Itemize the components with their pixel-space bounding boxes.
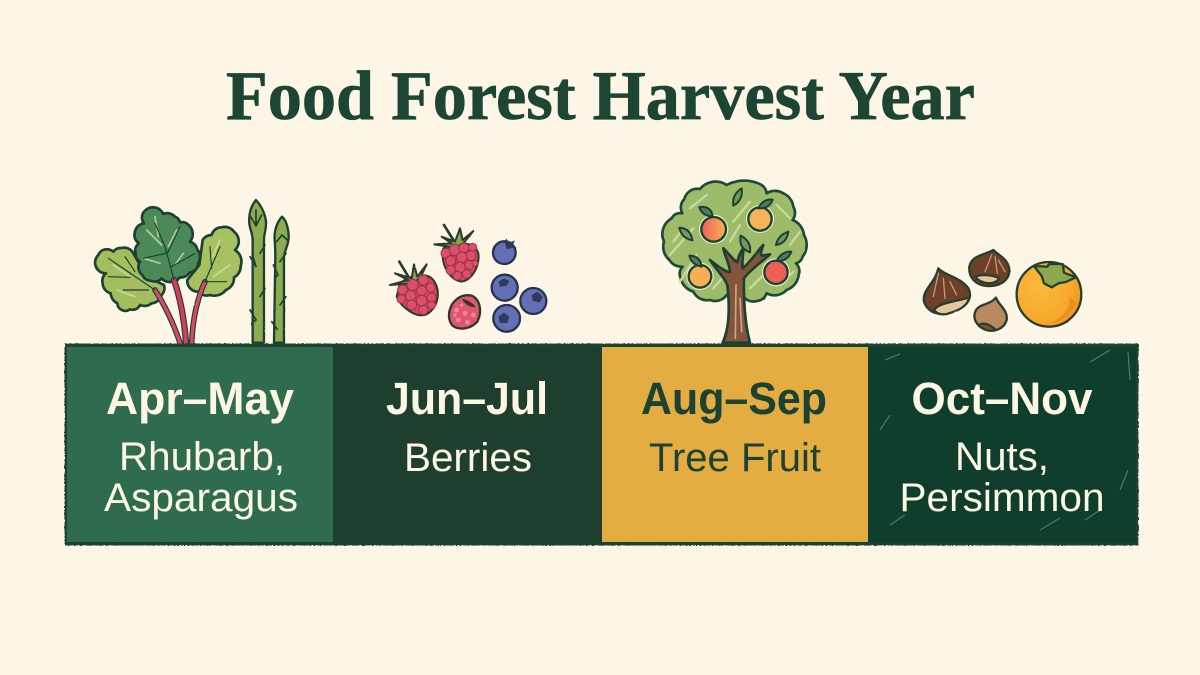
large chestnut <box>924 268 970 314</box>
tree crown <box>662 181 807 302</box>
panel: Aug-Sep <box>602 347 868 542</box>
icon: nuts and persimmon <box>924 250 1081 331</box>
title: Food Forest Harvest Year <box>226 58 975 135</box>
stalks <box>155 290 180 343</box>
panel: Jun-Jul: Jun–Jul <box>386 373 548 424</box>
leaves <box>679 188 791 267</box>
panel: Apr-May: Rhubarb, <box>119 435 285 479</box>
crown hatching <box>670 195 800 288</box>
leaf veins <box>108 223 227 290</box>
panel: Apr-May: Apr–May <box>106 373 294 424</box>
top raspberry <box>434 225 479 282</box>
icon: berries <box>390 225 546 332</box>
top chestnut <box>969 250 1009 286</box>
right rhubarb leaf <box>187 227 241 296</box>
panel: Oct-Nov <box>868 347 1136 542</box>
panel: Apr-May: Asparagus <box>104 476 298 520</box>
icon: apple tree <box>662 181 807 343</box>
timeline band <box>66 345 1137 544</box>
trunk <box>710 245 770 343</box>
hazelnut <box>974 298 1007 331</box>
panel: Aug-Sep: Aug–Sep <box>641 373 827 424</box>
panel: Aug-Sep: Tree Fruit <box>649 436 821 480</box>
leaf highlights <box>113 217 230 297</box>
persimmon <box>1017 262 1081 327</box>
band frame <box>66 345 1137 544</box>
blueberries <box>492 241 546 332</box>
panel: Oct-Nov: Nuts, <box>955 435 1049 479</box>
persimmon calyx <box>1034 264 1076 287</box>
icon: rhubarb and asparagus <box>95 200 289 343</box>
panel: Jun-Jul <box>333 347 602 542</box>
lower raspberry <box>449 295 480 329</box>
panel: Apr-May <box>67 347 333 542</box>
panel: Oct-Nov: Persimmon <box>900 476 1104 520</box>
apples <box>686 205 790 290</box>
left rhubarb leaf <box>95 248 164 311</box>
asparagus spears <box>249 200 266 343</box>
left raspberry <box>390 262 438 315</box>
panel: Oct-Nov: Oct–Nov <box>912 373 1092 424</box>
centre rhubarb leaf <box>134 207 200 282</box>
panel: Jun-Jul: Berries <box>404 436 532 480</box>
